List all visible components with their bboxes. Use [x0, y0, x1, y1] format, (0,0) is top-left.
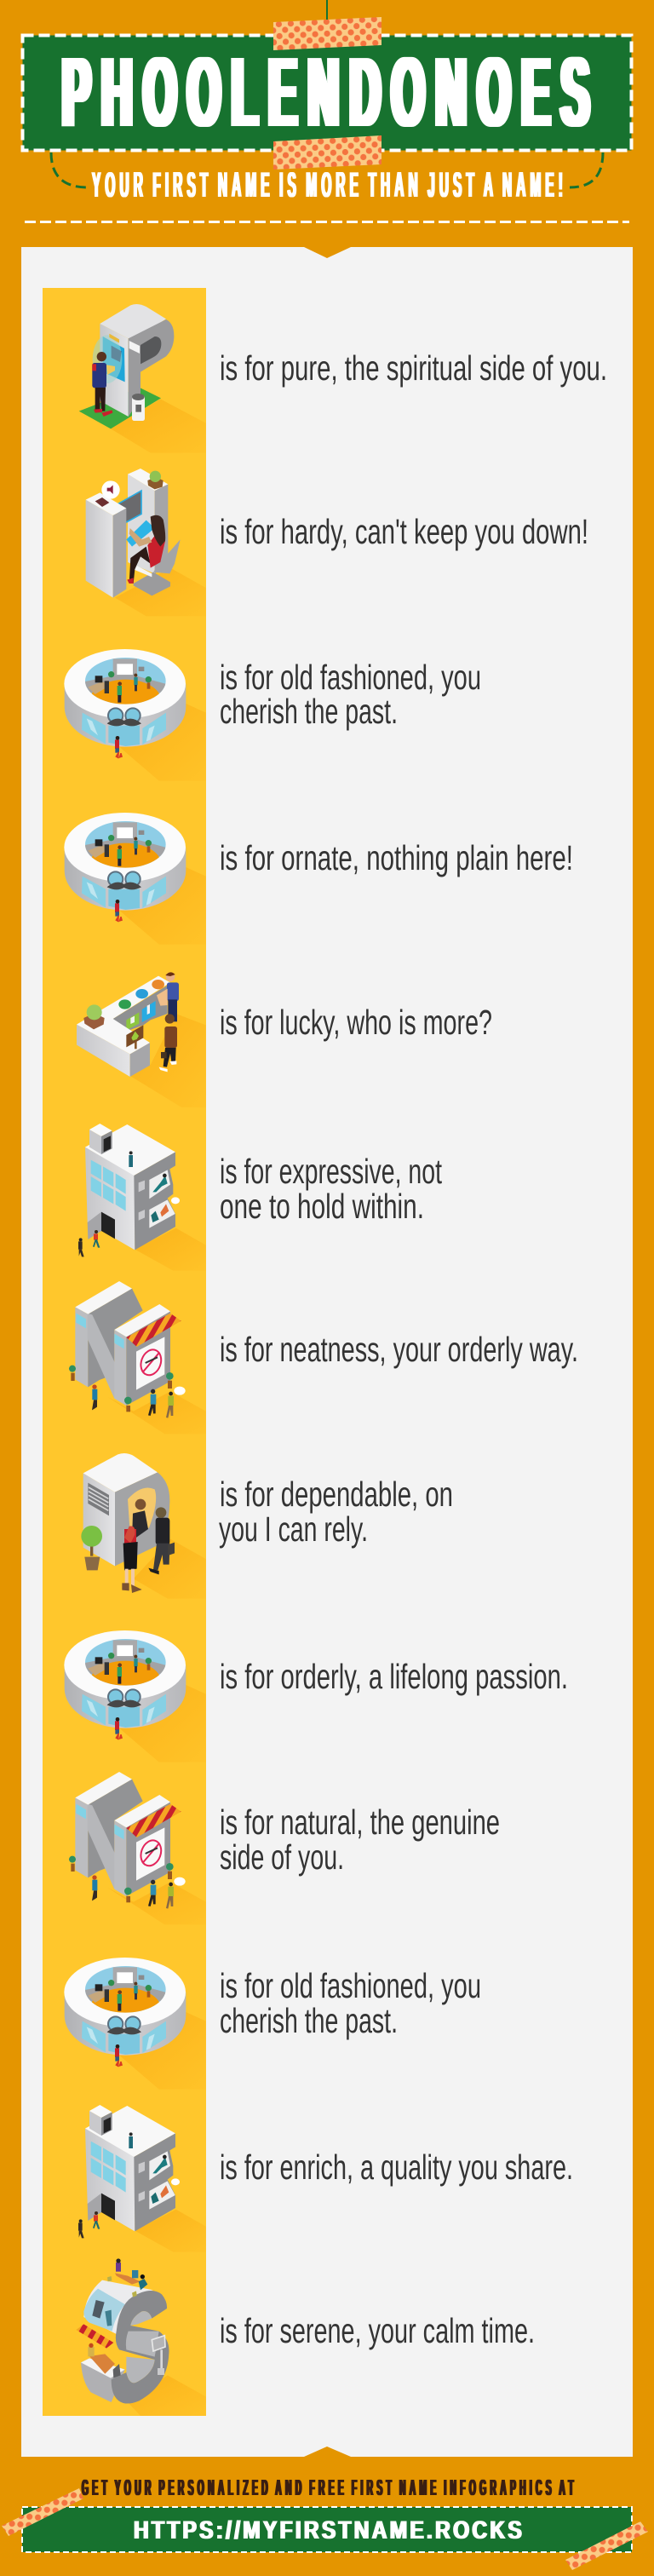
text: second old fashioned lines: cherish the past.: [220, 2001, 398, 2040]
text: first O lines: cherish the past.: [220, 692, 398, 731]
icon: letter D meeting: [81, 1453, 206, 1599]
text: dependable lines: is for dependable, on: [220, 1475, 453, 1514]
left curl connector: [51, 152, 88, 187]
icon: third letter O optician: [64, 1630, 206, 1762]
bottom header tape: [273, 135, 382, 170]
icon: letter N storefront: [69, 1281, 206, 1434]
dashed divider: [25, 221, 629, 223]
text: dependable lines: [219, 1475, 453, 1549]
text: L line: is for lucky, who is more?: [220, 1003, 492, 1042]
footer url: HTTPS://MYFIRSTNAME.ROCKS: [134, 2516, 525, 2544]
text: expressive lines: one to hold within.: [220, 1187, 424, 1226]
text: expressive lines: is for expressive, not: [220, 1152, 442, 1191]
icon: second letter N storefront: [69, 1772, 206, 1924]
icon: second letter O optician: [64, 813, 206, 945]
icon: letter H desk: [86, 469, 206, 616]
top tape: [273, 17, 382, 50]
text: expressive lines: [220, 1152, 442, 1226]
text: second old fashioned lines: [220, 1966, 481, 2040]
text: dependable lines: you I can rely.: [219, 1509, 368, 1549]
icon: letter P ATM: [79, 304, 206, 453]
text: natural lines: side of you.: [220, 1837, 344, 1877]
text: first O lines: is for old fashioned, you: [220, 658, 481, 697]
yellow letter column: [43, 288, 206, 2416]
icon: letter O optician: [64, 649, 206, 781]
text: second old fashioned lines: is for old fashioned, you: [220, 1966, 481, 2005]
icon: letter L recycling: [77, 972, 206, 1107]
right curl connector: [570, 152, 603, 187]
hanging thread: [326, 0, 328, 20]
text: natural lines: is for natural, the genuine: [220, 1803, 500, 1842]
footer banner: [22, 2507, 632, 2552]
footer left tape: [2, 2488, 83, 2536]
header banner: [22, 36, 632, 150]
text: natural lines: [220, 1803, 500, 1877]
text: first O lines: [220, 658, 481, 731]
icon: letter S office: [76, 2258, 206, 2416]
footer right tape: [565, 2521, 648, 2570]
icon: letter E building: [78, 1124, 206, 1271]
icon: second letter E building: [78, 2105, 206, 2252]
icon: fourth letter O optician: [64, 1958, 206, 2090]
